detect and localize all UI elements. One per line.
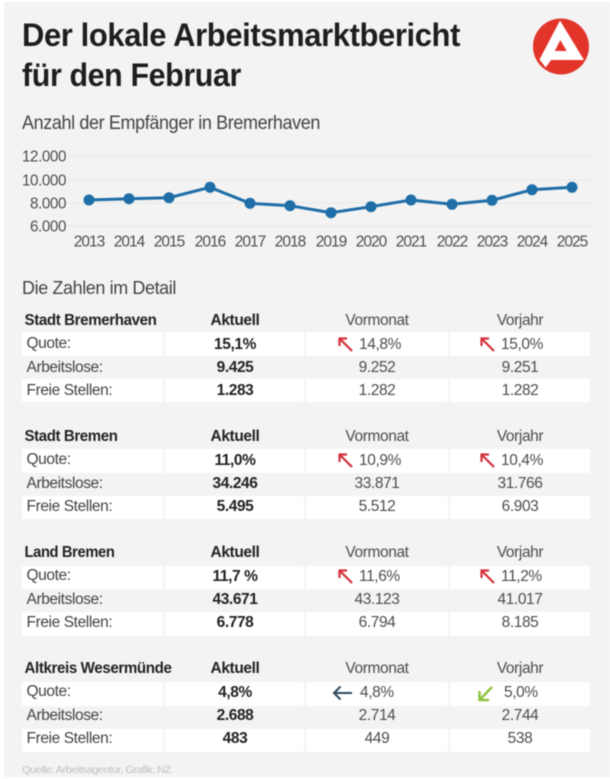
y axis labels: 6.000 <box>30 218 67 236</box>
panel: Stadt Bremerhaven <box>22 312 590 402</box>
x axis labels: 2021 <box>396 234 427 250</box>
x axis labels: 2015 <box>154 234 185 250</box>
panel: Altkreis Wesermünde: 449 <box>365 730 389 747</box>
panel: Stadt Bremen: 6.903 <box>502 498 538 515</box>
panel: Stadt Bremerhaven: 14,8% <box>359 336 402 353</box>
icon: arrow up <box>340 570 352 583</box>
x axis labels: 2016 <box>195 234 226 250</box>
panel: Stadt Bremen: 10,9% <box>359 452 402 469</box>
icon: Arbeitsagentur logo <box>533 18 589 74</box>
panel: Land Bremen: 43.123 <box>354 591 400 608</box>
panel: Stadt Bremen: 5.512 <box>359 498 395 515</box>
y axis labels: 8.000 <box>30 196 67 212</box>
panel: Stadt Bremen: Quote: <box>26 451 71 468</box>
panel: Stadt Bremen: 11,0% <box>214 452 256 469</box>
panel: Altkreis Wesermünde: 4,8% <box>218 684 252 701</box>
panel: Stadt Bremen: 10,4% <box>501 452 544 469</box>
panel: Stadt Bremerhaven: 15,1% <box>214 336 257 353</box>
x axis labels: 2017 <box>235 234 266 250</box>
icon: arrow up <box>482 338 494 351</box>
panel: Stadt Bremen: Vorjahr <box>497 428 543 445</box>
x axis labels: 2023 <box>477 234 508 250</box>
chart subtitle: Anzahl der Empfänger in Bremerhaven <box>22 113 320 134</box>
x axis labels: 2013 <box>74 234 105 250</box>
panel: Land Bremen: 41.017 <box>497 591 543 608</box>
panel: Land Bremen: 11,7 % <box>212 568 258 585</box>
panel: Stadt Bremerhaven: Freie Stellen: <box>26 382 112 399</box>
panel: Altkreis Wesermünde: Altkreis Wesermünde <box>24 660 172 677</box>
panel: Stadt Bremerhaven: 9.425 <box>217 359 254 376</box>
icon: arrow up <box>482 570 494 583</box>
panel: Altkreis Wesermünde: 538 <box>508 730 532 747</box>
panel: Land Bremen: 8.185 <box>502 614 538 631</box>
panel: Stadt Bremen: 31.766 <box>497 475 543 492</box>
x axis labels: 2025 <box>557 234 588 250</box>
panel: Land Bremen: Vorjahr <box>497 544 543 561</box>
x axis labels <box>74 234 588 250</box>
panel: Land Bremen <box>22 544 590 636</box>
icon: arrow down <box>480 687 492 700</box>
panel: Land Bremen: 11,6% <box>359 568 400 585</box>
title <box>22 17 461 93</box>
panel: Stadt Bremerhaven: 9.251 <box>502 359 538 376</box>
title: für den Februar <box>22 57 241 93</box>
icon: arrow up <box>482 454 494 467</box>
panel: Stadt Bremen: 33.871 <box>354 475 400 492</box>
panel: Altkreis Wesermünde: 4,8% <box>360 684 394 701</box>
data line <box>84 182 578 218</box>
panel: Land Bremen: Arbeitslose: <box>26 591 103 608</box>
panel: Stadt Bremerhaven: 15,0% <box>501 336 544 353</box>
panel: Land Bremen: Quote: <box>26 567 71 584</box>
y axis labels <box>22 148 67 236</box>
x axis labels: 2024 <box>517 234 549 250</box>
line chart: recipients 2013–2025 <box>22 148 595 250</box>
panel: Altkreis Wesermünde: Quote: <box>26 683 71 700</box>
panel: Altkreis Wesermünde: 2.714 <box>359 707 396 724</box>
panel: Stadt Bremen: Freie Stellen: <box>26 498 112 515</box>
panel: Altkreis Wesermünde <box>22 660 590 752</box>
panel: Stadt Bremerhaven: Aktuell <box>211 312 260 329</box>
panel: Stadt Bremerhaven: Vormonat <box>345 312 410 329</box>
icon: arrow up <box>340 338 352 351</box>
panel: Stadt Bremen: Vormonat <box>345 428 410 445</box>
source line: Quelle: Arbeitsagentur, Grafik: NZ <box>22 765 171 776</box>
panel: Land Bremen: 6.778 <box>217 614 254 631</box>
panel: Land Bremen: Land Bremen <box>24 544 114 561</box>
panel: Stadt Bremerhaven: 1.283 <box>217 382 254 399</box>
panel: Stadt Bremerhaven: Stadt Bremerhaven <box>24 312 156 329</box>
section heading: Die Zahlen im Detail <box>22 277 176 298</box>
panel: Altkreis Wesermünde: Aktuell <box>211 660 260 677</box>
x axis labels: 2019 <box>316 234 347 250</box>
panel: Altkreis Wesermünde: 2.688 <box>217 707 254 724</box>
panel: Stadt Bremerhaven: 1.282 <box>359 382 395 399</box>
panel: Stadt Bremen: 5.495 <box>217 498 254 515</box>
x axis labels: 2018 <box>275 234 306 250</box>
panel: Altkreis Wesermünde: Vormonat <box>345 660 410 677</box>
x axis labels: 2022 <box>437 234 468 250</box>
panel: Stadt Bremen: 34.246 <box>212 475 258 492</box>
panel: Land Bremen: 43.671 <box>212 591 258 608</box>
panel: Land Bremen: Vormonat <box>345 544 410 561</box>
panel: Stadt Bremerhaven: Quote: <box>26 335 71 352</box>
panel: Altkreis Wesermünde: 2.744 <box>502 707 539 724</box>
panel: Stadt Bremerhaven: Vorjahr <box>497 312 543 329</box>
x axis labels: 2020 <box>356 234 388 250</box>
panel: Altkreis Wesermünde: 483 <box>223 730 248 747</box>
panel: Land Bremen: Freie Stellen: <box>26 614 112 631</box>
panel: Altkreis Wesermünde: 5,0% <box>504 684 538 701</box>
icon: arrow up <box>340 454 352 467</box>
panel: Altkreis Wesermünde: Arbeitslose: <box>26 707 103 724</box>
title: Der lokale Arbeitsmarktbericht <box>22 17 461 53</box>
y axis labels: 12.000 <box>22 148 67 166</box>
panel: Land Bremen: 11,2% <box>501 568 542 585</box>
icon: arrow left <box>334 686 352 700</box>
panel: Stadt Bremen <box>22 428 590 519</box>
panel: Stadt Bremen: Aktuell <box>211 428 260 445</box>
panel: Altkreis Wesermünde: Vorjahr <box>497 660 543 677</box>
panel: Land Bremen: 6.794 <box>359 614 396 631</box>
panel: Altkreis Wesermünde: Freie Stellen: <box>26 730 112 747</box>
x axis labels: 2014 <box>114 234 146 250</box>
panel: Stadt Bremerhaven: Arbeitslose: <box>26 359 103 376</box>
y axis labels: 10.000 <box>22 172 67 190</box>
panel: Stadt Bremen: Stadt Bremen <box>24 428 118 445</box>
panel: Stadt Bremerhaven: 1.282 <box>502 382 538 399</box>
panel: Land Bremen: Aktuell <box>211 544 260 561</box>
panel: Stadt Bremerhaven: 9.252 <box>359 359 395 376</box>
panel: Stadt Bremen: Arbeitslose: <box>26 475 103 492</box>
